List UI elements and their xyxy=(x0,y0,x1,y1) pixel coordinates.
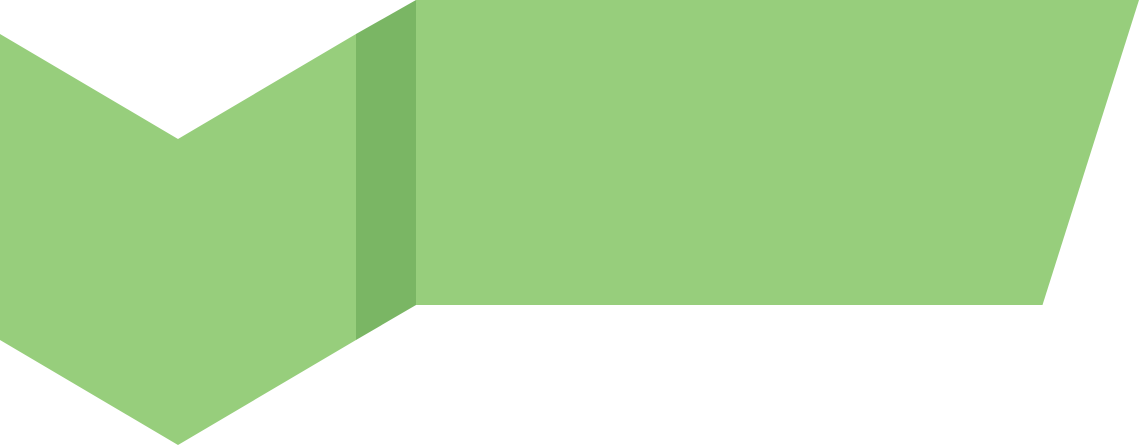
panel: fold shadow xyxy=(356,0,416,340)
panel: main banner xyxy=(416,0,1139,305)
panel: left chevron xyxy=(0,34,356,445)
